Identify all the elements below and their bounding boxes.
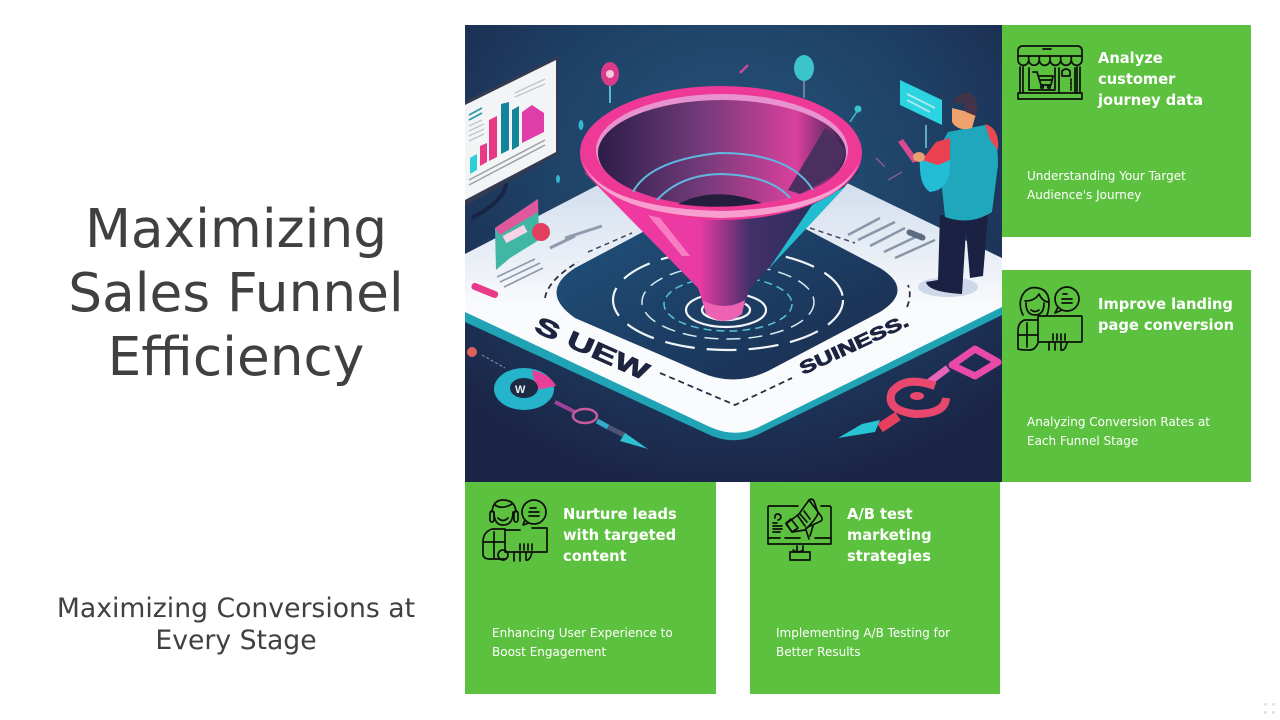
heading [1098, 50, 1203, 109]
heading: Improve landing [1098, 296, 1233, 313]
illustration: sales funnel on isometric platform [465, 25, 1002, 482]
description [492, 626, 673, 659]
dashed path around platform [545, 262, 910, 405]
icon: woman at laptop with chat bubble [1017, 286, 1083, 351]
heading: journey data [1098, 92, 1203, 109]
heading: with targeted [563, 527, 676, 544]
heading: Analyze [1098, 50, 1163, 67]
inner dark pad [556, 198, 898, 380]
card: improve landing page conversion [1002, 270, 1251, 482]
description: Better Results [776, 645, 860, 659]
title: Maximizing [85, 198, 387, 260]
subtitle: Maximizing Conversions at [57, 593, 415, 624]
document card with badge [471, 199, 602, 299]
description: Boost Engagement [492, 645, 606, 659]
icon: support agent with headset [482, 499, 548, 562]
heading: strategies [847, 548, 931, 565]
description [776, 626, 950, 659]
background [465, 25, 1002, 482]
description: Each Funnel Stage [1027, 434, 1138, 448]
heading [563, 506, 677, 565]
key gadget [838, 349, 998, 438]
heading [847, 506, 932, 565]
heading: page conversion [1098, 317, 1234, 334]
platform lettering: SUINESS. [796, 311, 912, 379]
description: Enhancing User Experience to [492, 626, 673, 640]
heading: customer [1098, 71, 1175, 88]
subtitle: Every Stage [155, 625, 317, 656]
description [1027, 169, 1186, 202]
title [68, 198, 404, 388]
monitor with bar chart [465, 56, 558, 218]
description: Implementing A/B Testing for [776, 626, 950, 640]
platform [465, 182, 1002, 440]
description: Analyzing Conversion Rates at [1027, 415, 1210, 429]
heading [1098, 296, 1234, 334]
heading: Nurture leads [563, 506, 677, 523]
heading: marketing [847, 527, 932, 544]
icon: storefront with cart [1017, 45, 1083, 100]
title: Efficiency [108, 326, 364, 388]
icon: monitor with megaphone [767, 498, 832, 561]
description: Audience's Journey [1027, 188, 1141, 202]
platform lettering: S UEW [531, 312, 653, 386]
card: analyze customer journey data [1002, 25, 1251, 237]
subtitle [57, 593, 415, 656]
platform lettering [531, 311, 912, 386]
title: Sales Funnel [68, 262, 404, 324]
floating map pins [556, 55, 902, 183]
corner handle dots [1264, 703, 1275, 714]
dashed concentric rings [613, 250, 843, 350]
card: nurture leads with targeted content [465, 482, 716, 694]
person with tablet [898, 80, 998, 294]
heading: A/B test [847, 506, 913, 523]
description: Understanding Your Target [1027, 169, 1186, 183]
gauge and pencil gadget: W [515, 384, 526, 396]
card: A/B test marketing strategies [750, 482, 1000, 694]
description [1027, 415, 1210, 448]
gauge and pencil gadget [467, 347, 648, 449]
funnel [580, 86, 862, 321]
heading: content [563, 548, 627, 565]
